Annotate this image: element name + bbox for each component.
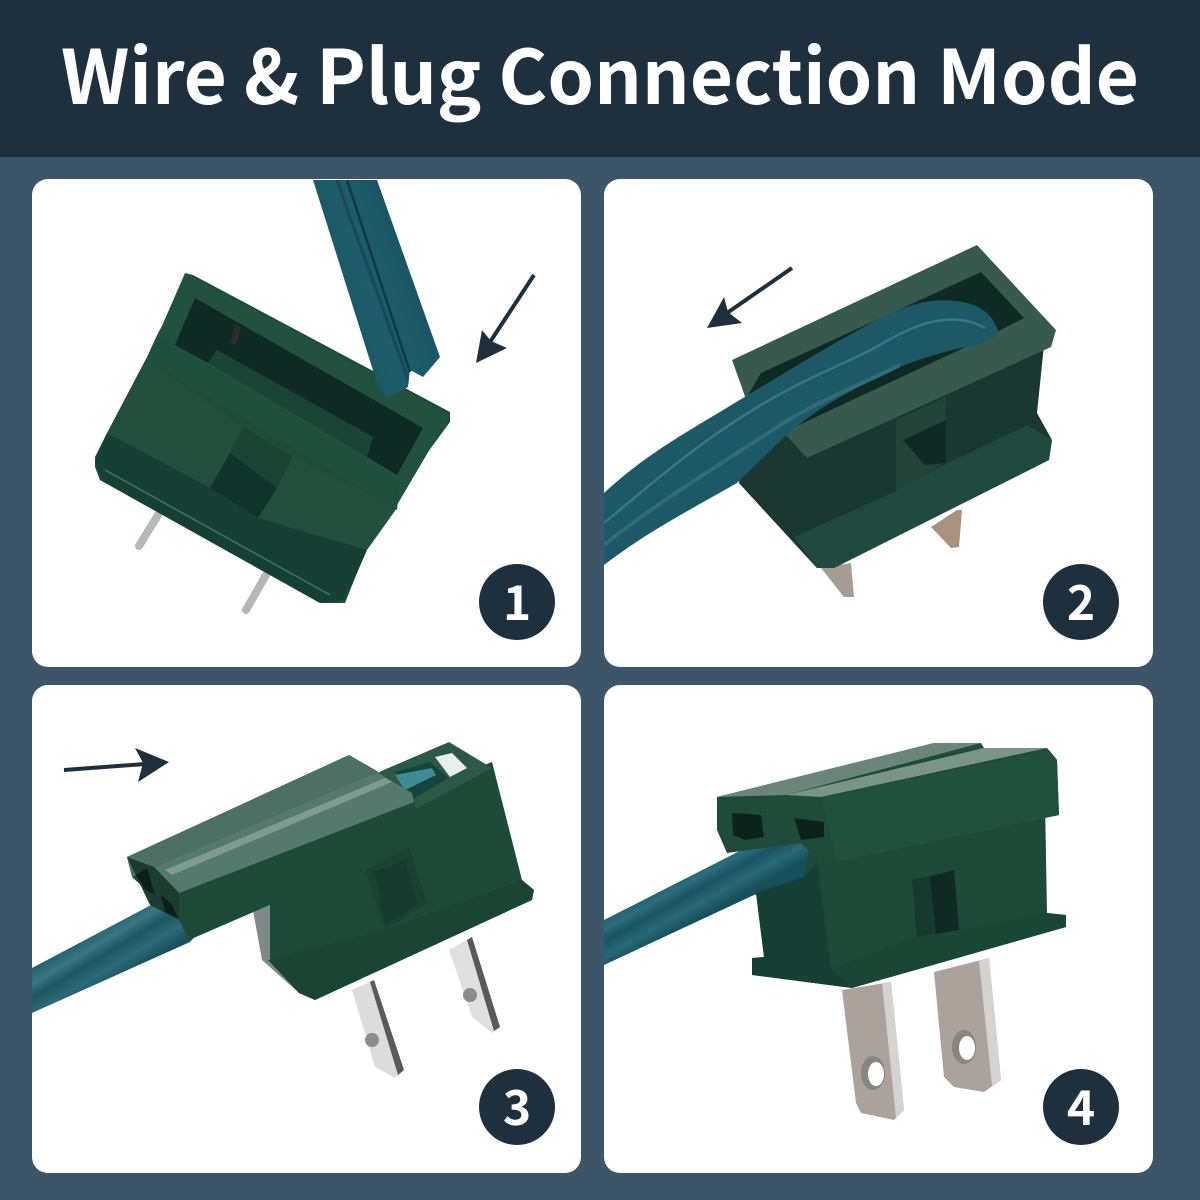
step badge 4: 4 xyxy=(1067,1069,1095,1139)
title: Wire & Plug Connection Mode xyxy=(61,17,1139,126)
wire 3 xyxy=(32,895,205,1013)
step badge 3: 3 xyxy=(503,1069,531,1139)
arrow 1 xyxy=(476,275,534,363)
cap 4 xyxy=(717,743,1059,862)
arrow 3 xyxy=(64,748,169,782)
wire 4 xyxy=(604,830,835,965)
prong 1 right xyxy=(246,575,266,610)
prong 2 xyxy=(934,958,1001,1092)
panel 3: closing the plug xyxy=(32,685,581,1173)
prong left xyxy=(352,980,404,1078)
top plate 2 xyxy=(732,245,1056,458)
prong 1 left xyxy=(139,515,158,546)
step badge 1 xyxy=(479,564,555,640)
plug body 2 xyxy=(732,245,1056,568)
flange 2 xyxy=(794,425,1052,568)
arrow 2 xyxy=(707,268,792,328)
wire 2 xyxy=(604,300,998,565)
plug body 3 xyxy=(127,742,534,1000)
cap 3 xyxy=(127,755,424,940)
prong 1 xyxy=(842,982,904,1120)
prong back xyxy=(931,510,962,548)
panel 1: insert wire into open plug xyxy=(32,179,581,667)
step badge 1: 1 xyxy=(503,564,531,634)
prong front xyxy=(821,563,854,597)
header band xyxy=(0,0,1200,157)
step badge 3 xyxy=(479,1069,555,1145)
plug body 4 xyxy=(717,743,1066,988)
step badge 2 xyxy=(1043,564,1119,640)
wire 1 xyxy=(313,180,440,398)
panel 4: finished plug xyxy=(604,685,1153,1173)
prong right xyxy=(449,937,500,1033)
cavity 1 xyxy=(175,298,423,475)
plug body 1 xyxy=(95,273,450,603)
back rim 3 xyxy=(379,742,492,810)
step badge 2: 2 xyxy=(1067,564,1095,634)
panel 2: slide wire through plug xyxy=(604,179,1153,667)
step badge 4 xyxy=(1043,1069,1119,1145)
